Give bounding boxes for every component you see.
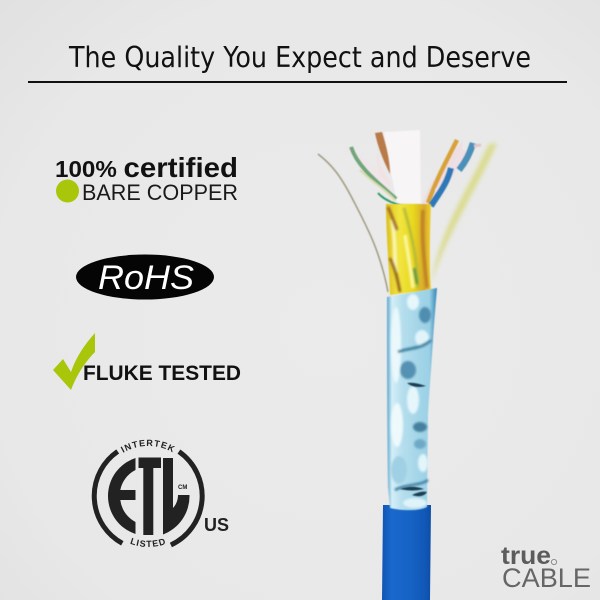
blue outer jacket xyxy=(382,505,431,600)
cable photo xyxy=(318,130,497,600)
letter L xyxy=(163,458,190,534)
copper pair xyxy=(375,132,391,195)
outer ring left xyxy=(94,451,122,543)
text: INTERTEK: INTERTEK xyxy=(120,440,175,453)
yellow foil xyxy=(386,204,431,295)
text: RoHS: RoHS xyxy=(98,259,194,297)
text: CM mark: CM xyxy=(178,485,187,491)
logo: trueCABLE xyxy=(501,542,591,593)
title rule xyxy=(28,81,567,83)
outer ring right xyxy=(171,452,202,545)
white separator film xyxy=(384,130,421,204)
text: bare copper: BARE COPPER xyxy=(82,180,238,205)
text: US: US xyxy=(204,515,229,535)
silver-blue foil shield xyxy=(387,288,437,510)
text: CABLE: CABLE xyxy=(502,563,591,593)
badge: Fluke tested xyxy=(53,333,241,390)
thin drain wire xyxy=(318,154,388,292)
text: fluke tested: FLUKE TESTED xyxy=(83,362,241,385)
yellow foil highlights xyxy=(388,207,427,292)
title: The Quality You Expect and Deserve xyxy=(68,41,531,74)
blue pair xyxy=(431,143,481,206)
logo: ETL listed xyxy=(92,440,229,548)
foil dark folds xyxy=(400,383,427,496)
icon: green check mark xyxy=(53,333,95,390)
letter T xyxy=(138,458,161,535)
registered mark xyxy=(551,559,557,565)
badge: RoHS xyxy=(76,254,214,300)
icon: green dot xyxy=(56,180,79,202)
text: true: true xyxy=(501,542,551,570)
text: 100% certified: 100% certified xyxy=(55,152,238,183)
orange pair xyxy=(422,140,463,204)
blurred yellow-green wire xyxy=(432,143,497,282)
letter E xyxy=(108,458,136,534)
text: LISTED: LISTED xyxy=(130,538,165,547)
green pair xyxy=(344,147,406,207)
foil creases xyxy=(391,294,431,508)
black ellipse xyxy=(76,254,214,300)
badge: 100% certified bare copper xyxy=(55,152,238,205)
